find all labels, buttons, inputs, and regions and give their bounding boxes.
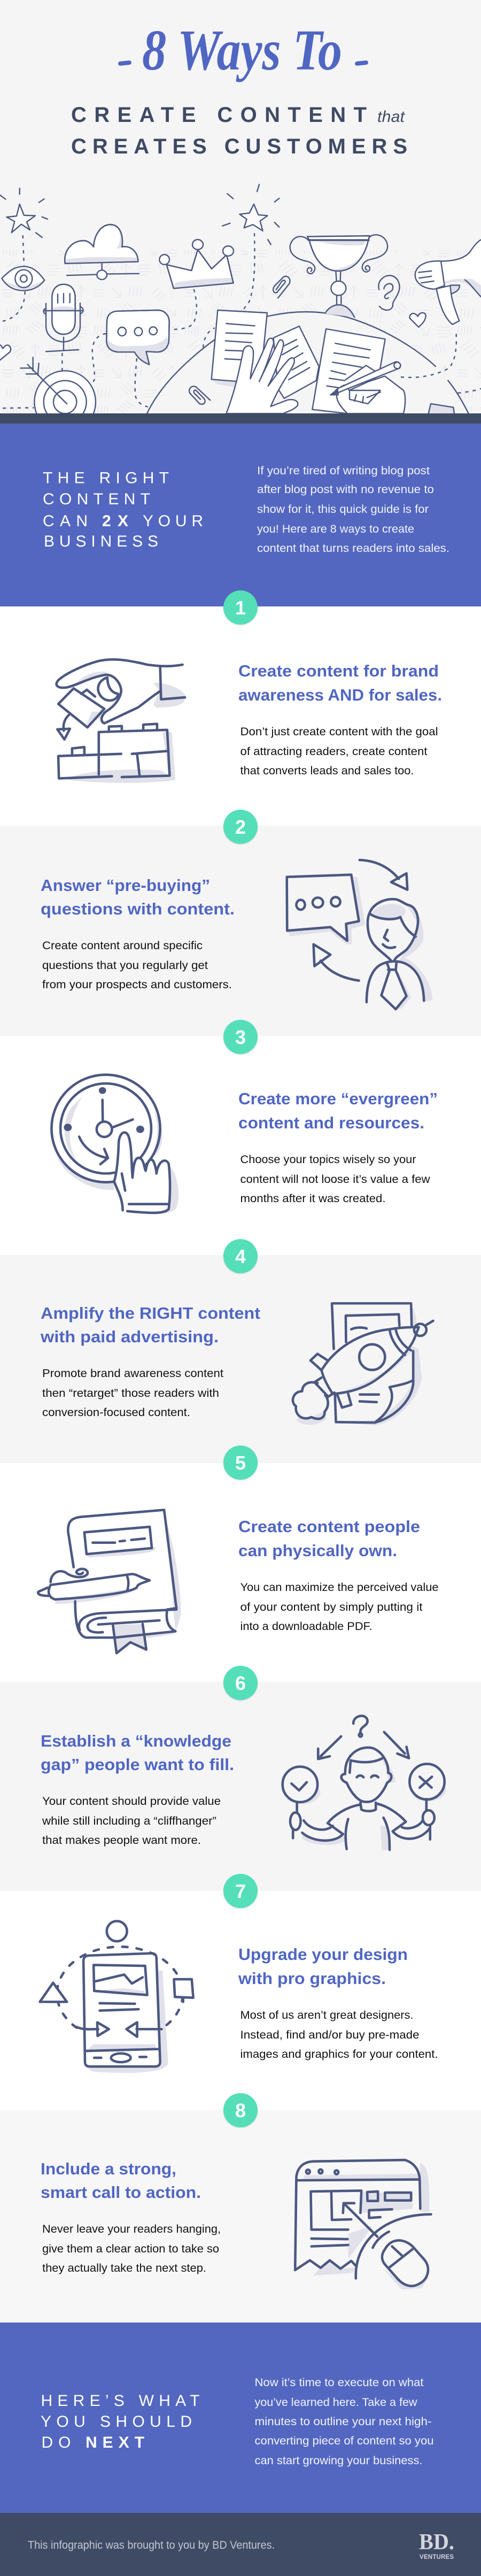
badge 3 (223, 1020, 258, 1055)
text: You can maximize the perceived value (241, 1581, 438, 1594)
right hand and pencil (337, 376, 405, 413)
badge 2 (223, 810, 258, 845)
footer (0, 2513, 481, 2576)
panel: step 7 (0, 1891, 481, 2110)
closing heading (41, 2392, 200, 2451)
cloud (65, 225, 138, 264)
heading: Create content for brand (238, 662, 439, 680)
heading: with pro graphics. (238, 1969, 386, 1988)
logo: VENTURES (420, 2554, 454, 2560)
panel: step 3 (0, 1036, 481, 1255)
intro text: after blog post with no revenue to (257, 483, 434, 496)
title: 8 Ways To (142, 19, 342, 82)
text: content will not loose it’s value a few (241, 1173, 430, 1186)
panel: step 2 (0, 826, 481, 1036)
text: while still including a “cliffhanger” (42, 1814, 216, 1827)
heading (41, 876, 235, 918)
heading (238, 1945, 408, 1988)
megaphone (441, 240, 481, 297)
panel: step 4 (0, 1255, 481, 1463)
credit: This infographic was brought to you by BD Ventures. (28, 2539, 275, 2551)
intro text: show for it, this quick guide is for (257, 503, 429, 516)
paper 2 (274, 326, 319, 398)
dome (147, 312, 469, 413)
heading (238, 1517, 420, 1560)
speech bubble (106, 310, 169, 365)
text: Create content around specific (42, 939, 203, 952)
star rays (0, 184, 279, 244)
intro text: you! Here are 8 ways to create (257, 522, 414, 535)
star 1 (6, 204, 35, 233)
badge 6: 6 (235, 1672, 246, 1694)
intro text: content that turns readers into sales. (257, 542, 449, 555)
heading: awareness AND for sales. (238, 686, 442, 704)
heading: can physically own. (238, 1541, 397, 1560)
heading: Create content people (238, 1517, 420, 1536)
badge 1 (223, 590, 258, 626)
icon: person with speech bubble (287, 860, 432, 1009)
heading: Upgrade your design (238, 1945, 408, 1964)
text: into a downloadable PDF. (241, 1620, 372, 1633)
badge 7: 7 (235, 1880, 246, 1902)
closing text: you’ve learned here. Take a few (254, 2396, 417, 2409)
icon: hand and briefcases (57, 659, 185, 783)
intro heading: THE RIGHT (43, 470, 169, 487)
text (42, 2223, 221, 2274)
badge 1: 1 (235, 597, 246, 619)
closing heading: HERE’S WHAT (41, 2392, 200, 2410)
intro heading: YOUR (143, 512, 203, 530)
star 2 (239, 204, 268, 231)
hero illustration (0, 184, 481, 433)
badge 4 (223, 1239, 258, 1274)
text (241, 1581, 438, 1633)
heading: Create more “evergreen” (238, 1089, 438, 1108)
text: Choose your topics wisely so your (241, 1153, 416, 1166)
panel: intro (0, 424, 481, 606)
badge 4: 4 (235, 1245, 246, 1267)
text: of attracting readers, create content (241, 745, 428, 758)
text: give them a clear action to take so (42, 2242, 219, 2255)
heart left (0, 345, 11, 360)
text: Never leave your readers hanging, (42, 2223, 221, 2235)
heading: Establish a “knowledge (41, 1732, 231, 1750)
panel: next steps (0, 2323, 481, 2513)
paperclip 2 (273, 276, 290, 298)
closing heading: DO (42, 2434, 71, 2451)
heading: questions with content. (41, 899, 235, 918)
text (42, 1367, 223, 1419)
dome outline (147, 312, 469, 413)
paperclip (189, 386, 210, 404)
subtitle: CREATES CUSTOMERS (71, 135, 407, 158)
text (241, 2009, 438, 2060)
panel: step 5 (0, 1463, 481, 1682)
text: Most of us aren’t great designers. (241, 2009, 414, 2021)
heading: smart call to action. (41, 2183, 201, 2202)
intro heading: 2X (102, 512, 128, 530)
text: of your content by simply putting it (241, 1601, 423, 1613)
subtitle: that (377, 108, 406, 126)
text: that converts leads and sales too. (241, 764, 414, 777)
logo: BD. (419, 2530, 454, 2555)
eye (2, 266, 44, 290)
text (241, 1153, 430, 1205)
dark divider (0, 413, 481, 424)
heading: content and resources. (238, 1113, 424, 1132)
intro text: If you’re tired of writing blog post (257, 464, 430, 477)
closing text: Now it’s time to execute on what (254, 2376, 424, 2389)
desk item (429, 404, 454, 413)
heading: gap” people want to fill. (41, 1755, 234, 1774)
hero drawing (0, 204, 481, 433)
text: months after it was created. (241, 1192, 386, 1205)
icon: clock and hand (51, 1075, 179, 1214)
closing heading: NEXT (86, 2434, 144, 2451)
connectors (0, 233, 481, 408)
text: Instead, find and/or buy pre-made (241, 2028, 419, 2041)
left hand (226, 338, 298, 413)
closing heading: YOU SHOULD (41, 2413, 192, 2431)
intro heading: BUSINESS (44, 533, 158, 550)
panel: step 8 (0, 2110, 481, 2323)
badge 6 (223, 1666, 258, 1701)
target (34, 371, 96, 433)
crown (167, 250, 234, 288)
badge 3: 3 (235, 1026, 246, 1048)
heading (41, 1732, 234, 1774)
text: Promote brand awareness content (42, 1367, 223, 1380)
heading (238, 662, 442, 704)
heading: with paid advertising. (40, 1327, 219, 1346)
badge 8 (223, 2093, 258, 2128)
badge 5: 5 (235, 1452, 246, 1474)
icon: rocket and papers (293, 1303, 433, 1425)
microphone (52, 284, 75, 334)
badge 7 (223, 1874, 258, 1909)
text (42, 939, 232, 991)
heading (238, 1089, 438, 1132)
heading: Answer “pre-buying” (41, 876, 210, 895)
closing text: minutes to outline your next high- (254, 2415, 432, 2428)
paper 1 (212, 380, 241, 388)
text: conversion-focused content. (42, 1406, 190, 1419)
heart 2 (409, 313, 426, 327)
closing text (254, 2376, 434, 2467)
closing text: can start growing your business. (254, 2454, 422, 2467)
intro text (257, 464, 449, 555)
heading: Include a strong, (41, 2159, 176, 2178)
closing text: converting piece of content so you (254, 2434, 434, 2447)
icon: browser and mouse (295, 2160, 431, 2289)
intro heading (43, 470, 203, 550)
text: images and graphics for your content. (241, 2048, 438, 2060)
background: header (0, 0, 481, 414)
icon: book and pen (38, 1510, 181, 1653)
text: they actually take the next step. (42, 2262, 206, 2274)
intro heading: CAN (43, 512, 88, 530)
heading (41, 2159, 201, 2202)
heading (40, 1304, 260, 1346)
icon: person choosing (283, 1716, 446, 1850)
text: Your content should provide value (42, 1795, 221, 1808)
heading: Amplify the RIGHT content (41, 1304, 260, 1322)
trophy (326, 305, 354, 317)
badge 5 (223, 1445, 258, 1481)
intro heading: CONTENT (43, 490, 150, 508)
badge 8: 8 (235, 2100, 246, 2121)
panel: step 1 (0, 606, 481, 826)
text: questions that you regularly get (42, 959, 208, 972)
text (241, 725, 438, 777)
panel: step 6 (0, 1682, 481, 1891)
subtitle (71, 103, 407, 158)
text (42, 1795, 221, 1847)
text: that makes people want more. (42, 1834, 201, 1847)
ear (378, 275, 400, 310)
subtitle: CREATE CONTENT (71, 103, 367, 127)
text: Don’t just create content with the goal (241, 725, 438, 738)
text: from your prospects and customers. (42, 978, 232, 991)
badge 2: 2 (235, 816, 246, 838)
paper 3 (312, 329, 385, 413)
icon: phone with shapes (40, 1921, 193, 2073)
text: then “retarget” those readers with (42, 1387, 219, 1400)
